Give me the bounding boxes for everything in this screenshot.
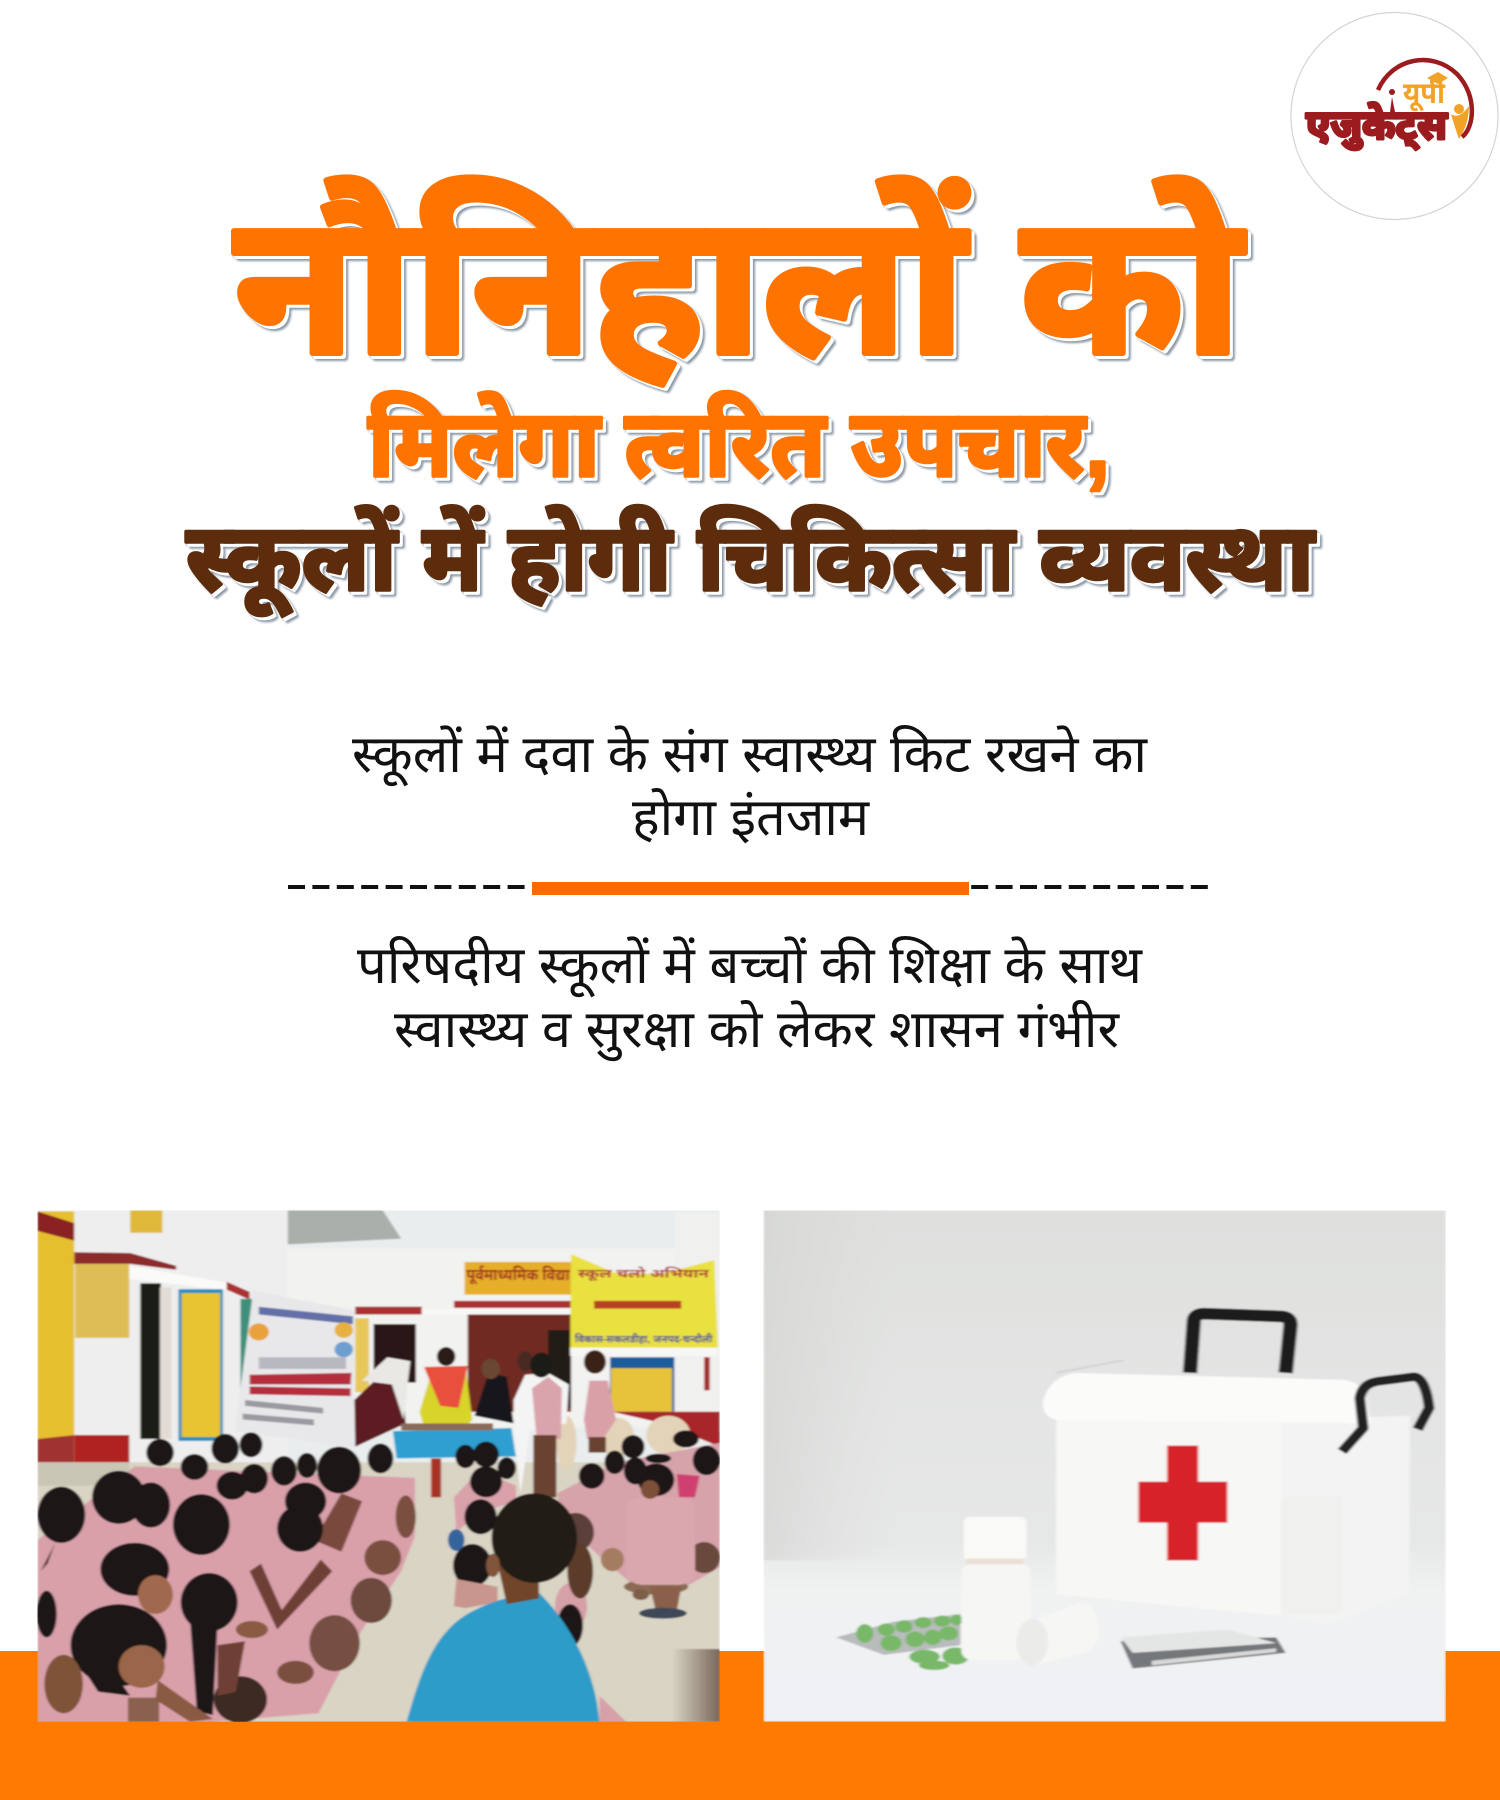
photo: school children health camp: स्कूल चलो अभियान — [578, 1267, 710, 1281]
title line 3: स्कूलों में होगी चिकित्सा व्यवस्था — [186, 505, 1316, 617]
subtitle block 2 — [357, 936, 1143, 1062]
logo: UP Educators badge: एजुकेट्स — [1306, 101, 1448, 150]
subtitle block 1 — [352, 725, 1149, 847]
subtitle block 1: स्कूलों में दवा के संग स्वास्थ्य किट रखने का — [352, 725, 1149, 787]
divider with orange centre bar — [288, 882, 1213, 895]
title line 2: मिलेगा त्वरित उपचार, — [368, 391, 1110, 496]
logo: UP Educators badge: यूपी — [1403, 76, 1446, 112]
photo: school children health camp: विकास-सकलडीहा, जनपद-चन्दौली — [575, 1333, 713, 1345]
logo: UP Educators badge — [1291, 12, 1498, 220]
subtitle block 2: परिषदीय स्कूलों में बच्चों की शिक्षा के साथ — [357, 936, 1143, 998]
subtitle block 1: होगा इंतजाम — [632, 789, 870, 847]
subtitle block 2: स्वास्थ्य व सुरक्षा को लेकर शासन गंभीर — [394, 1000, 1121, 1062]
photo: first aid kit and medicines — [763, 1210, 1446, 1722]
orange footer band — [0, 1651, 1500, 1800]
title line 1: नौनिहालों को — [234, 176, 1245, 395]
photo: school children health camp — [37, 1210, 720, 1723]
photo: school children health camp: पूर्वमाध्यमिक विद्या — [466, 1266, 570, 1286]
